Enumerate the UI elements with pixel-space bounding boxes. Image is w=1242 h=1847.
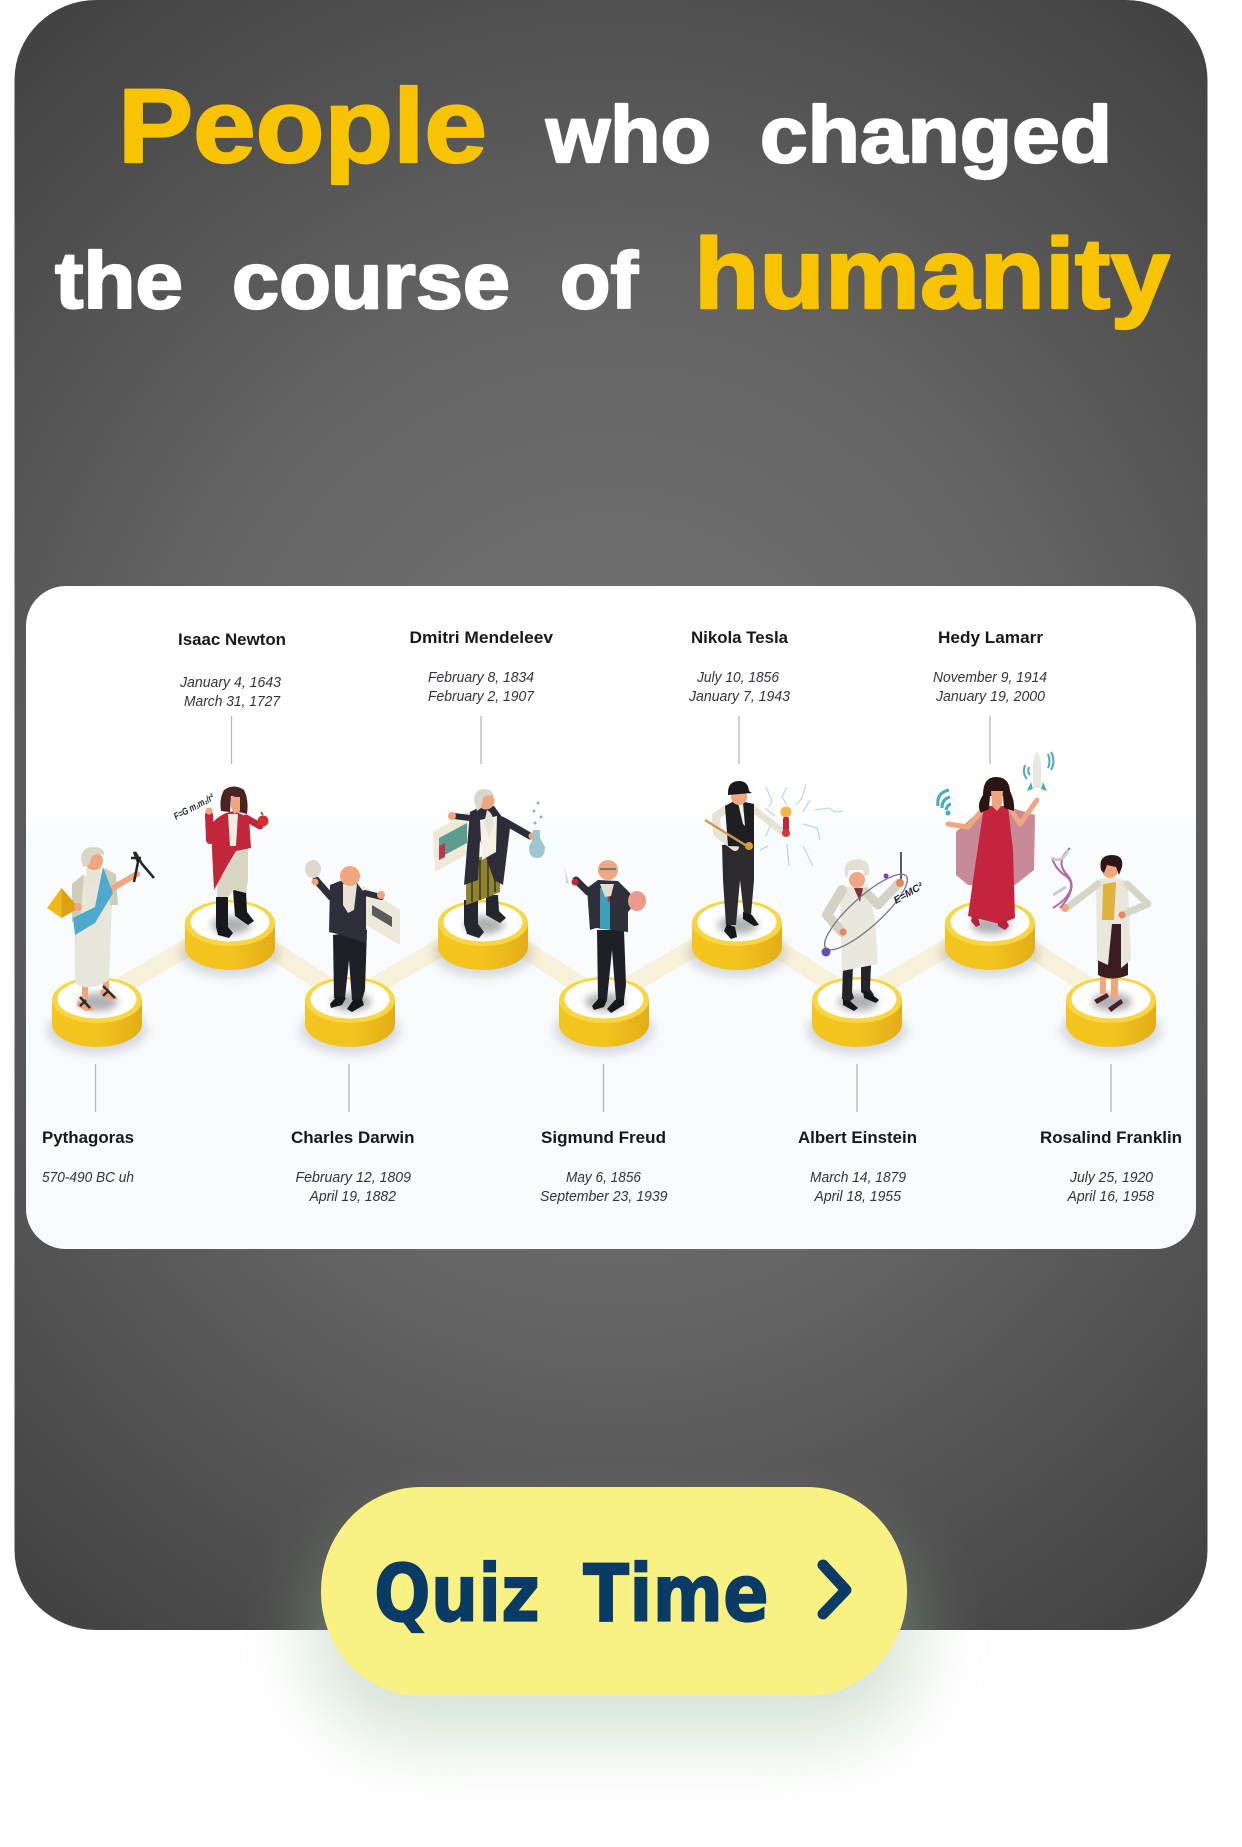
label: Isaac Newton: Isaac Newton [178, 630, 286, 649]
figure: Sigmund Freud [565, 860, 646, 1013]
figure: Dmitri Mendeleev [433, 789, 545, 938]
title: who [545, 90, 711, 179]
title: of [560, 236, 638, 325]
label: Rosalind Franklin: July 25, 1920 [1069, 1169, 1154, 1186]
button shadow [310, 1530, 918, 1740]
label: Charles Darwin [291, 1128, 414, 1205]
label: Hedy Lamarr: November 9, 1914 [933, 669, 1047, 686]
label: Dmitri Mendeleev [410, 628, 554, 705]
platforms [47, 900, 1161, 1054]
label: Hedy Lamarr [933, 628, 1047, 705]
label: Dmitri Mendeleev: February 8, 1834 [428, 669, 534, 686]
label: Nikola Tesla: January 7, 1943 [688, 688, 791, 705]
quiz time button: Time [583, 1548, 769, 1640]
figure: Hedy Lamarr [938, 751, 1054, 930]
label: Albert Einstein: March 14, 1879 [810, 1169, 907, 1186]
title: changed [760, 90, 1112, 179]
label: Isaac Newton: March 31, 1727 [184, 693, 281, 710]
label: Charles Darwin: Charles Darwin [291, 1128, 414, 1147]
quiz time button: Quiz [374, 1548, 540, 1640]
title: course [232, 236, 510, 325]
title [55, 68, 1170, 330]
figure: Isaac Newton: F=G m₁m₂/r² [172, 792, 217, 823]
icon: chevron arrow [823, 1565, 846, 1614]
figure: Rosalind Franklin [1052, 848, 1148, 1012]
figure: Albert Einstein: E=MC² [892, 881, 926, 907]
figure: Isaac Newton [172, 786, 268, 938]
label: Rosalind Franklin [1040, 1128, 1182, 1205]
figure: Nikola Tesla [705, 781, 843, 939]
label: Sigmund Freud: Sigmund Freud [541, 1128, 666, 1147]
label: Nikola Tesla: July 10, 1856 [696, 669, 780, 686]
label: Charles Darwin: February 12, 1809 [296, 1169, 412, 1186]
title: the [55, 236, 183, 325]
label: Sigmund Freud [540, 1128, 668, 1205]
title: humanity [694, 218, 1170, 330]
label: Isaac Newton: January 4, 1643 [179, 674, 282, 691]
timeline connector path [97, 923, 1111, 1000]
label: Albert Einstein: April 18, 1955 [814, 1188, 902, 1205]
label: Rosalind Franklin: Rosalind Franklin [1040, 1128, 1182, 1147]
label: Nikola Tesla [688, 628, 791, 705]
label: Charles Darwin: April 19, 1882 [309, 1188, 397, 1205]
label: Pythagoras: Pythagoras [42, 1128, 134, 1147]
label: Rosalind Franklin: April 16, 1958 [1067, 1188, 1155, 1205]
label: Dmitri Mendeleev: Dmitri Mendeleev [410, 628, 554, 647]
label: Sigmund Freud: September 23, 1939 [540, 1188, 668, 1205]
label: Nikola Tesla: Nikola Tesla [691, 628, 789, 647]
figure: Charles Darwin [305, 860, 400, 1012]
label: Hedy Lamarr: January 19, 2000 [935, 688, 1046, 705]
label: Pythagoras: 570-490 BC uh [42, 1169, 134, 1186]
figure: Albert Einstein [816, 852, 926, 1011]
label: Pythagoras [42, 1128, 134, 1186]
leader lines [96, 716, 1111, 1112]
timeline card [26, 586, 1196, 1249]
label: Dmitri Mendeleev: February 2, 1907 [428, 688, 535, 705]
title: People [118, 68, 487, 185]
label: Isaac Newton [178, 630, 286, 710]
label: Hedy Lamarr: Hedy Lamarr [938, 628, 1043, 647]
label: Sigmund Freud: May 6, 1856 [566, 1169, 642, 1186]
quiz time button [321, 1487, 907, 1696]
figure: Pythagoras [47, 847, 154, 1011]
label: Albert Einstein [798, 1128, 917, 1205]
label: Albert Einstein: Albert Einstein [798, 1128, 917, 1147]
